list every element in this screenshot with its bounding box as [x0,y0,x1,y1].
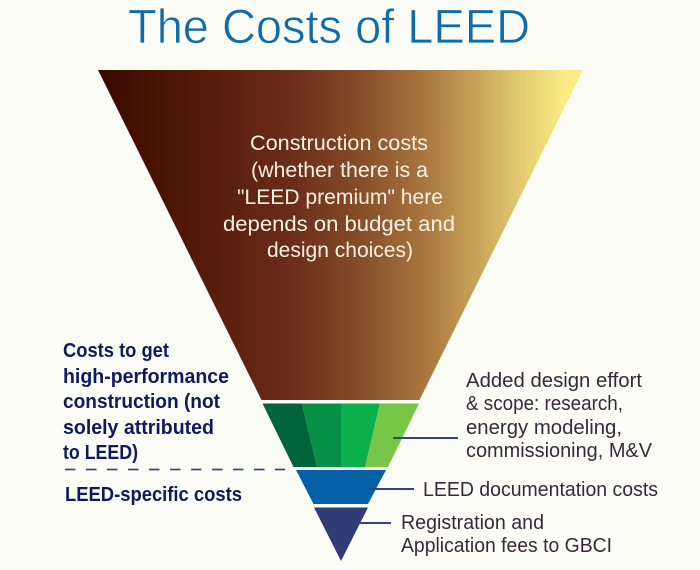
text: high-performance costs label: high-performance [63,366,229,388]
text: high-performance costs label [63,340,229,464]
divider: dashed line between cost types [65,468,285,470]
text: registration and application fees label: Application fees to GBCI [401,535,612,557]
text: LEED documentation costs label: LEED documentation costs [423,479,658,501]
arrow: leader to navy tier [360,522,391,524]
panel: registration fees navy tier [314,508,368,561]
text: added design effort label: Added design effort [466,370,642,392]
text: added design effort label: commissioning, M&V [466,440,653,462]
text: construction costs description: "LEED premium" here [237,185,443,209]
arrow: leader to green tier [393,437,458,439]
text: high-performance costs label: Costs to get [63,340,169,362]
text: high-performance costs label: solely attributed [63,417,214,439]
text: high-performance costs label: construction (not [63,391,220,413]
text: construction costs description: design choices) [267,238,413,262]
text: construction costs description: depends on budget and [223,212,455,236]
panel: high-performance green tier [262,404,419,467]
text: registration and application fees label [401,512,612,557]
arrow: leader to blue tier [368,488,414,490]
panel: LEED documentation blue tier [296,470,386,504]
text: added design effort label [466,370,653,462]
text: registration and application fees label: Registration and [401,512,544,534]
text: construction costs description: Construction costs [250,131,428,155]
panel: construction costs tier [98,70,583,400]
text: added design effort label: & scope: research, [466,393,623,415]
title: The Costs of LEED [128,1,530,54]
text: high-performance costs label: to LEED) [63,442,138,464]
text: construction costs description [223,131,455,262]
text: added design effort label: energy modeling, [466,417,622,439]
text: construction costs description: (whether there is a [251,158,428,182]
text: LEED-specific costs label: LEED-specific costs [65,484,242,506]
